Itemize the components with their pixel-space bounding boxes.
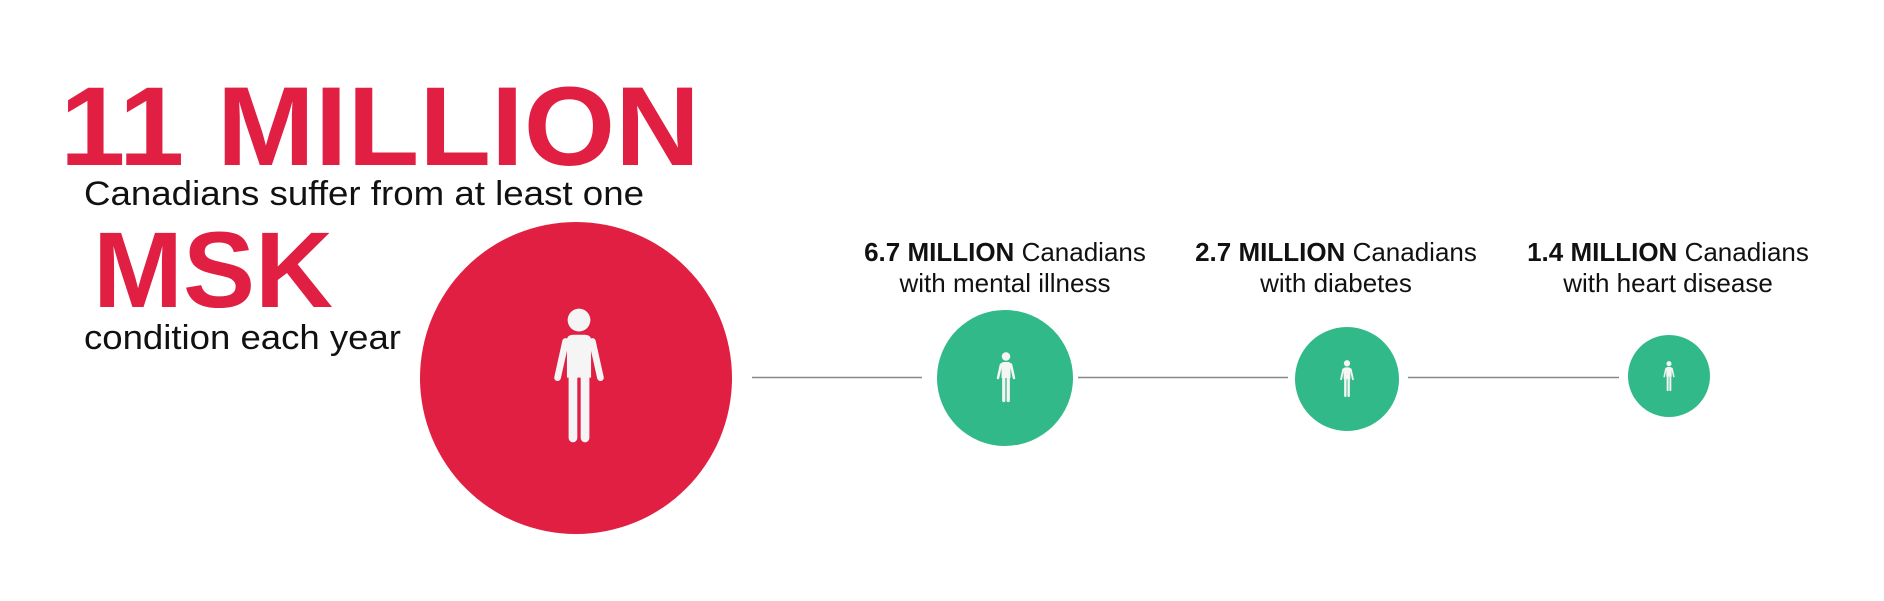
stat: diabetes bbox=[1195, 237, 1477, 431]
subtitle line 2: condition each year bbox=[84, 319, 401, 357]
red circle with person icon bbox=[420, 222, 732, 534]
stat: heart disease bbox=[1527, 237, 1809, 417]
title: 11 MILLION: 11 MILLION bbox=[60, 64, 700, 189]
icon: person large bbox=[558, 309, 600, 438]
heading: MSK: MSK bbox=[93, 209, 333, 330]
connector line 1 bbox=[752, 376, 922, 378]
connector line 3 bbox=[1408, 376, 1619, 378]
stat: heart disease: with heart disease bbox=[1562, 268, 1773, 298]
stat: mental illness bbox=[864, 237, 1146, 446]
stat: mental illness: with mental illness bbox=[899, 268, 1110, 298]
stat: diabetes: with diabetes bbox=[1259, 268, 1412, 298]
connector line 2 bbox=[1078, 376, 1288, 378]
stat: diabetes: 2.7 MILLION Canadians bbox=[1195, 237, 1477, 267]
stat: heart disease: 1.4 MILLION Canadians bbox=[1527, 237, 1809, 267]
stat: mental illness: 6.7 MILLION Canadians bbox=[864, 237, 1146, 267]
subtitle line 1: Canadians suffer from at least one bbox=[84, 175, 644, 213]
